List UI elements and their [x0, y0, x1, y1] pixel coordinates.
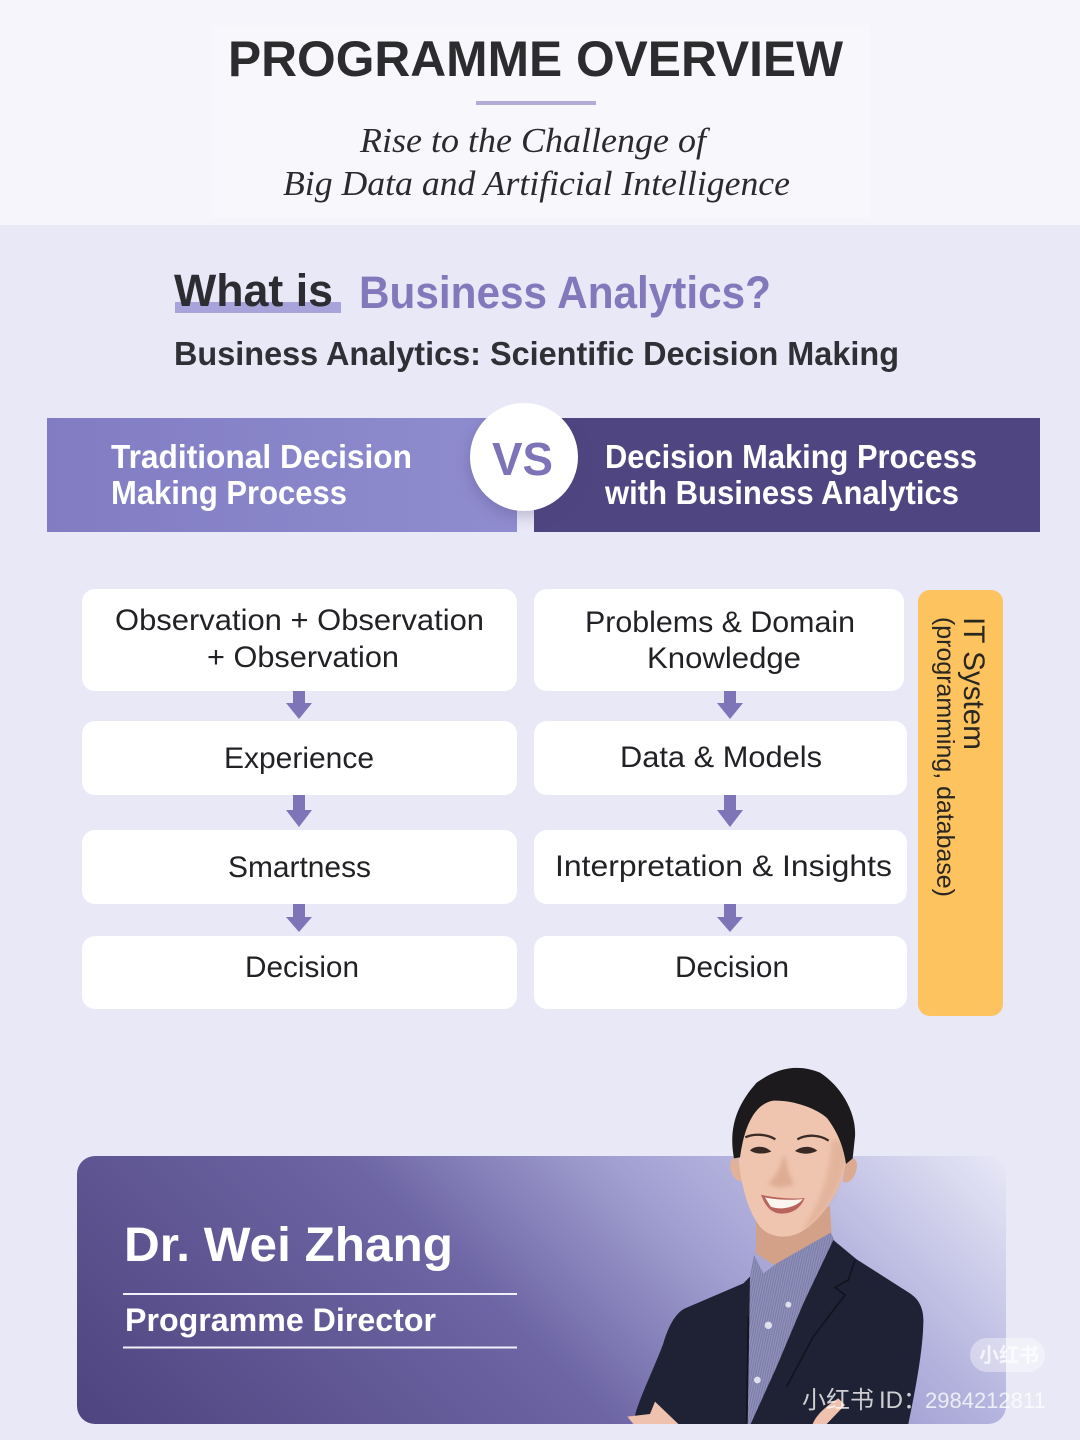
- ears: [730, 1157, 743, 1181]
- heading: what is business analytics: Business Analytics?: [359, 267, 771, 318]
- subtitle: Rise to the Challenge of: [359, 121, 710, 160]
- step: data and models: [534, 721, 907, 795]
- right header band: [534, 418, 1040, 532]
- arrow: [717, 795, 743, 827]
- jacket: [635, 1277, 750, 1424]
- arrow: [717, 904, 743, 932]
- VS badge: VS: [492, 433, 553, 485]
- step: interpretation and insights: Interpretation & Insights: [555, 850, 892, 883]
- step: experience: Experience: [224, 742, 374, 775]
- VS badge: [469, 403, 579, 517]
- shirt buttons: [754, 1302, 791, 1383]
- face shading: [802, 1140, 848, 1232]
- profile card: [77, 1156, 1006, 1424]
- IT system side bar: [918, 590, 1003, 1016]
- neck: [756, 1207, 832, 1267]
- business analytics process column: [534, 589, 907, 1009]
- step: decision: Decision: [675, 951, 789, 984]
- arrow: [717, 691, 743, 719]
- left header band: [47, 418, 517, 532]
- nose: [768, 1157, 794, 1187]
- mouth: [761, 1195, 805, 1214]
- step: observation: Observation + Observation: [115, 604, 484, 637]
- step: smartness: [82, 830, 517, 904]
- heading: what is business analytics: [174, 265, 771, 318]
- IT system side bar: (programming, database): [931, 617, 959, 897]
- left header band: Making Process: [111, 474, 347, 511]
- header section: [0, 0, 1080, 225]
- title: PROGRAMME OVERVIEW: [228, 31, 844, 87]
- IT system side bar: IT System: [957, 617, 990, 750]
- watermark badge: [970, 1338, 1045, 1372]
- title divider: [476, 101, 596, 105]
- right header band: with Business Analytics: [604, 474, 959, 511]
- arrow: [286, 795, 312, 827]
- step: smartness: Smartness: [228, 851, 371, 884]
- hands: [627, 1402, 678, 1424]
- step: problems and domain knowledge: [534, 589, 904, 691]
- role rule: [123, 1346, 517, 1348]
- step: observation: [82, 589, 517, 691]
- subtitle: Big Data and Artificial Intelligence: [283, 164, 790, 203]
- step: decision: Decision: [245, 951, 359, 984]
- lapel shadow: [747, 1260, 855, 1423]
- watermark badge: 小红书: [979, 1339, 1039, 1368]
- face: [737, 1092, 848, 1237]
- comparison header: [47, 403, 1040, 532]
- arrow: [286, 691, 312, 719]
- watermark id: 小红书: [802, 1387, 874, 1414]
- step: problems and domain knowledge: Problems & Domain: [585, 606, 855, 639]
- watermark id: ID：: [879, 1387, 927, 1414]
- name: Dr. Wei Zhang: [124, 1219, 453, 1272]
- watermark id: 2984212811: [925, 1388, 1046, 1413]
- step: data and models: Data & Models: [620, 741, 822, 774]
- step: experience: [82, 721, 517, 795]
- arrow: [286, 904, 312, 932]
- right header band: Decision Making Process: [605, 438, 977, 475]
- step: interpretation and insights: [534, 830, 907, 904]
- role: Programme Director: [125, 1302, 436, 1338]
- subtitle: [283, 121, 790, 203]
- eyebrows: [745, 1135, 829, 1141]
- shirt: [746, 1233, 835, 1424]
- step: decision: [82, 936, 517, 1009]
- step: problems and domain knowledge: Knowledge: [647, 642, 801, 675]
- eyes: [750, 1147, 817, 1154]
- heading: what is business analytics: What is: [174, 265, 333, 316]
- left header band: Traditional Decision: [111, 438, 412, 475]
- name rule: [123, 1293, 517, 1295]
- traditional process column: [82, 589, 517, 1009]
- sub-heading: Business Analytics: Scientific Decision Making: [174, 335, 899, 372]
- step: observation: + Observation: [207, 641, 399, 674]
- step: decision: [534, 936, 907, 1009]
- hair: [732, 1068, 855, 1164]
- portrait: [627, 1068, 923, 1424]
